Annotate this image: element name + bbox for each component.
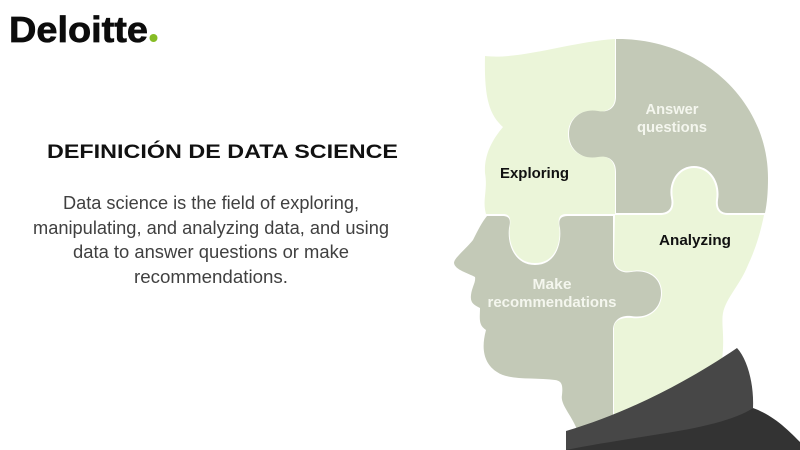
head puzzle illustration (454, 39, 800, 450)
label: Make recommendations (488, 276, 616, 311)
body text: Data science is the field of exploring, (63, 193, 359, 213)
jacket shoulder (566, 408, 800, 450)
body text: data to answer questions or make (73, 242, 349, 262)
label: Answer questions: questions (637, 119, 707, 136)
logo: Deloitte: Deloitte (9, 9, 148, 50)
label: Answer questions: Answer (646, 101, 699, 118)
body text: manipulating, and analyzing data, and using (33, 218, 389, 238)
puzzle piece: Exploring (485, 39, 615, 263)
label: Exploring: Exploring (500, 165, 569, 182)
jacket collar (566, 348, 753, 450)
body text: recommendations. (134, 267, 288, 287)
body text (33, 193, 389, 287)
puzzle piece: Analyzing (614, 168, 764, 418)
label: Make recommendations: Make (532, 276, 572, 293)
puzzle piece: Answer questions (569, 39, 768, 213)
puzzle piece: Make recommendations (454, 216, 661, 432)
label: Analyzing: Analyzing (659, 232, 731, 249)
label: Answer questions (637, 101, 707, 136)
label: Make recommendations: recommendations (488, 294, 616, 311)
title: DEFINICIÓN DE DATA SCIENCE (47, 139, 398, 163)
